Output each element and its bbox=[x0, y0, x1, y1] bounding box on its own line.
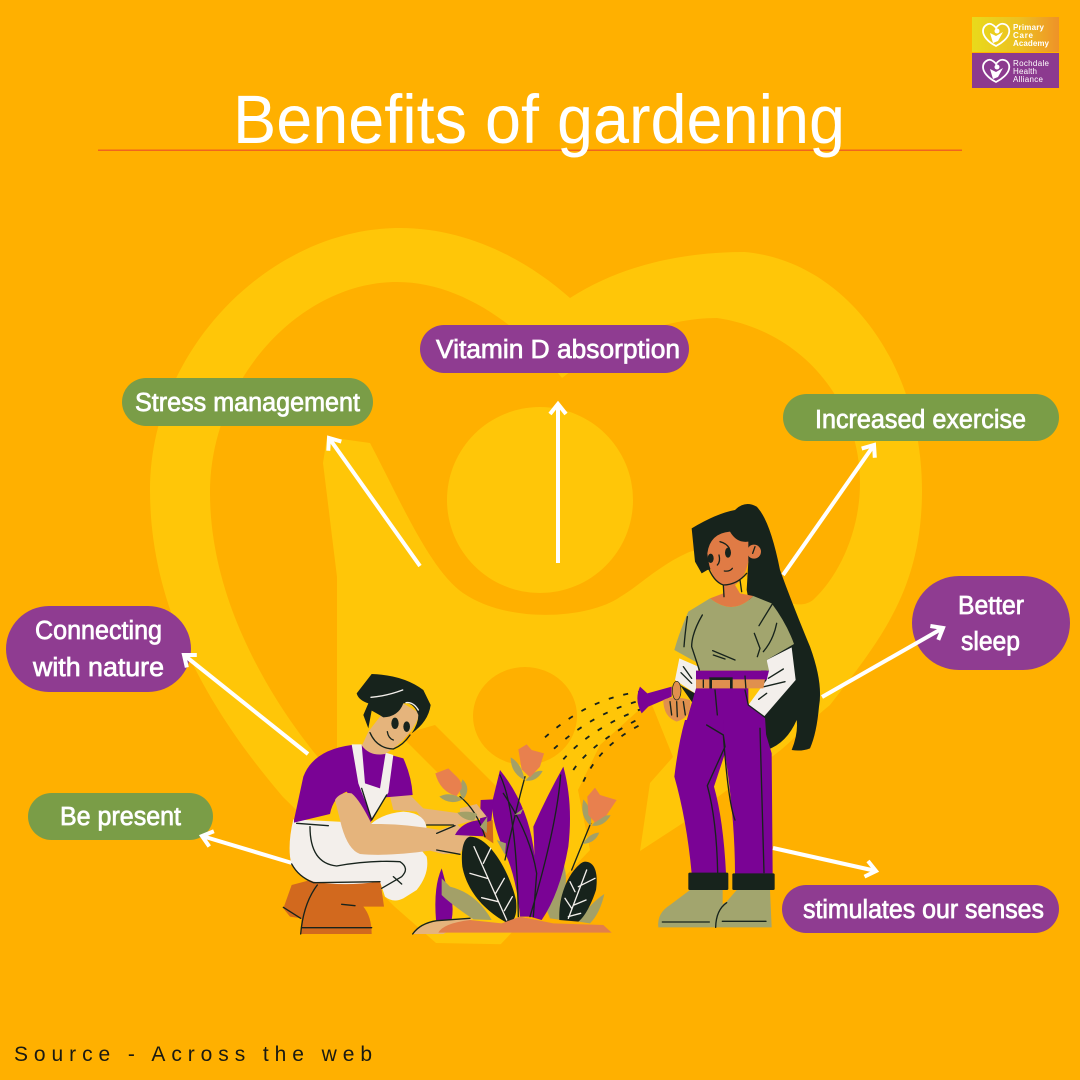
purple shirt bbox=[294, 745, 413, 823]
title: Benefits of gardening bbox=[233, 81, 845, 158]
belt bbox=[696, 671, 769, 680]
black leaves bbox=[462, 837, 516, 923]
hand bbox=[663, 697, 690, 722]
logo: Primary Care Academy and Rochdale Health Alliance: Academy bbox=[1013, 39, 1050, 48]
divider line bbox=[98, 150, 962, 151]
soil bbox=[413, 918, 473, 934]
pill: Be present bbox=[28, 793, 213, 840]
watermark heart logo bbox=[150, 228, 922, 945]
long hair bbox=[692, 504, 820, 751]
face details bbox=[391, 718, 399, 729]
logo: Primary Care Academy and Rochdale Health Alliance: Alliance bbox=[1013, 75, 1044, 84]
pill: Stress management bbox=[122, 378, 373, 426]
illustration: woman upper body bbox=[637, 504, 820, 751]
pill: Connecting with nature: with nature bbox=[32, 654, 164, 682]
boots bbox=[658, 890, 723, 927]
logo: Primary Care Academy and Rochdale Health Alliance bbox=[972, 17, 1059, 88]
illustration: woman legs and boots bbox=[658, 720, 775, 927]
pill: Better sleep bbox=[912, 576, 1070, 670]
pill: Connecting with nature bbox=[6, 606, 191, 692]
apron body bbox=[290, 812, 427, 900]
arrow to Connecting with nature bbox=[184, 655, 308, 754]
source note: Source - Across the web bbox=[14, 1043, 372, 1066]
pill: stimulates our senses: stimulates our senses bbox=[803, 896, 1044, 924]
arrow to Stress management bbox=[329, 438, 420, 566]
logo: Primary Care Academy and Rochdale Health Alliance: Primary bbox=[1013, 23, 1045, 32]
arrow to Increased exercise bbox=[783, 445, 874, 575]
pill: Better sleep: Better bbox=[958, 592, 1024, 620]
pill: stimulates our senses bbox=[782, 885, 1059, 933]
pill: Increased exercise bbox=[783, 394, 1059, 441]
trousers bbox=[674, 720, 726, 873]
pill: Be present: Be present bbox=[60, 803, 181, 831]
small leaf left bbox=[435, 868, 453, 920]
olive t-shirt bbox=[674, 596, 794, 671]
logo: Primary Care Academy and Rochdale Health Alliance: Care bbox=[1013, 31, 1034, 40]
back arm bbox=[390, 795, 487, 825]
pill: Connecting with nature: Connecting bbox=[35, 617, 162, 645]
hand over plant bbox=[460, 804, 487, 823]
illustration: man gardening and plants bbox=[283, 674, 643, 934]
flower stems bbox=[460, 777, 591, 870]
pill: Stress management: Stress management bbox=[135, 389, 360, 417]
arrow to Be present bbox=[202, 836, 292, 863]
pill: Vitamin D absorption: Vitamin D absorption bbox=[436, 336, 680, 364]
trousers and boots bbox=[283, 878, 384, 934]
white sleeves bbox=[675, 658, 698, 694]
sleeve dark cuff bbox=[680, 685, 695, 704]
water spray bbox=[545, 692, 643, 782]
face and neck bbox=[707, 532, 753, 607]
flower leaves bbox=[439, 757, 611, 855]
pill: Vitamin D absorption bbox=[420, 325, 689, 373]
olive base leaves bbox=[442, 878, 492, 920]
arrow to stimulates our senses bbox=[773, 848, 876, 871]
apron bib bbox=[352, 744, 393, 818]
arrow to Vitamin D absorption bbox=[556, 404, 560, 563]
hair bbox=[357, 674, 431, 733]
logo: Primary Care Academy and Rochdale Health Alliance: Health bbox=[1013, 67, 1037, 76]
purple leaves bbox=[530, 767, 570, 920]
trousers top bbox=[680, 688, 767, 743]
tulip flowers bbox=[435, 768, 462, 796]
pill: Increased exercise: Increased exercise bbox=[815, 406, 1026, 434]
neck and head bbox=[362, 703, 420, 755]
arrow to Better sleep bbox=[822, 628, 943, 697]
pill: Better sleep: sleep bbox=[961, 628, 1020, 656]
logo: Primary Care Academy and Rochdale Health Alliance: Rochdale bbox=[1013, 59, 1050, 68]
cuffs bbox=[688, 873, 728, 890]
hose nozzle bbox=[637, 687, 672, 713]
front arm bbox=[335, 793, 470, 855]
